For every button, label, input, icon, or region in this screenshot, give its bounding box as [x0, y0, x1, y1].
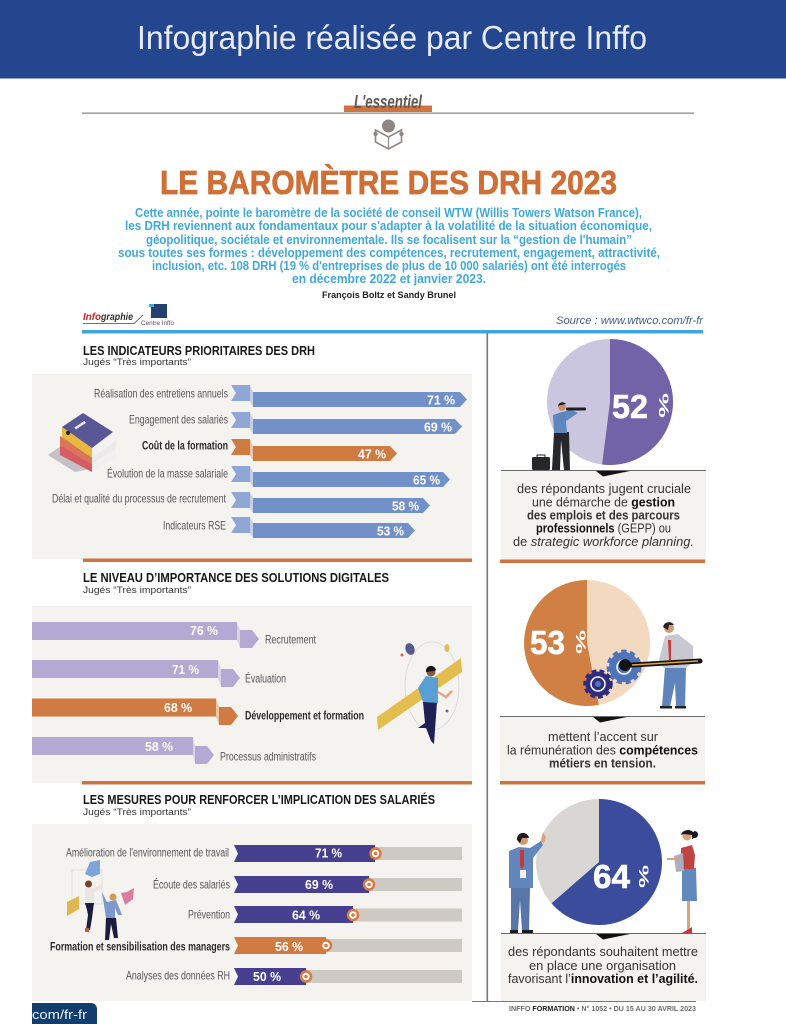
- intro paragraph: inclusion, etc. 108 DRH (19 % d'entreprises de plus de 10 000 salariés) ont été interrogés: [152, 259, 626, 273]
- icon: man carrying ruler: [377, 642, 462, 744]
- caption panel: professionnels (GEPP) ou: [536, 520, 671, 536]
- bar: prévention: 64 %: [292, 908, 320, 922]
- bar: amélioration de l'environnement de travail: [66, 845, 462, 862]
- infographie logo: [83, 304, 174, 327]
- bar: délai et qualité du processus de recrutement: 58 %: [392, 500, 419, 514]
- infographie logo: graphie: [100, 312, 133, 323]
- bar: développement et formation: Développement et formation: [245, 708, 364, 722]
- caption panel: des emplois et des parcours: [527, 508, 680, 522]
- bar: coût de la formation: [142, 438, 397, 462]
- icon: woman with folder: [667, 830, 698, 933]
- stat: 64 % innovation: [501, 799, 706, 1001]
- bar: développement et formation: [32, 698, 364, 725]
- infographie logo: Centre Inffo: [141, 320, 174, 327]
- bar: écoute des salariés: 69 %: [305, 878, 333, 892]
- bar: amélioration de l'environnement de travail: 71 %: [315, 846, 342, 860]
- footer: issue reference: INFFO FORMATION • N° 1052 • DU 15 AU 30 AVRIL 2023: [509, 1004, 696, 1013]
- bar: recrutement: 76 %: [190, 624, 218, 638]
- bar: prévention: Prévention: [188, 908, 230, 922]
- bar: formation et sensibilisation des managers: 56 %: [275, 940, 303, 954]
- bar: analyses des données RH: [126, 968, 462, 985]
- bar: engagement des salariés: 69 %: [424, 420, 452, 434]
- bar: analyses des données RH: Analyses des données RH: [126, 968, 230, 982]
- authors: François Boltz et Sandy Brunel: [322, 290, 456, 301]
- stat: 53 % rémunération: [500, 580, 705, 784]
- icon: reader with open book: [373, 120, 404, 149]
- bar: indicateurs RSE: [163, 517, 415, 538]
- header banner: Infographie réalisée par Centre Inffo: [137, 19, 647, 56]
- bar: formation et sensibilisation des managers: [50, 937, 462, 954]
- bar: évaluation: 71 %: [172, 663, 199, 677]
- bar: recrutement: Recrutement: [265, 632, 316, 646]
- heading: indicateurs: Jugés “Très importants”: [83, 357, 191, 368]
- heading: solutions digitales: [83, 571, 389, 596]
- caption panel: mettent l’accent sur: [548, 729, 659, 744]
- intro paragraph: [118, 206, 660, 286]
- bar: indicateurs RSE: Indicateurs RSE: [163, 518, 226, 532]
- bar: processus administratifs: Processus administratifs: [220, 750, 316, 764]
- heading: indicateurs: [83, 344, 315, 368]
- icon: colleagues and puzzle pieces: [67, 860, 134, 940]
- caption panel: [501, 933, 706, 1001]
- caption panel: des répondants jugent cruciale: [517, 481, 691, 496]
- column divider: [486, 333, 488, 1001]
- pie chart 52 %: %: [656, 393, 672, 419]
- icon: man with telescope: [532, 402, 586, 470]
- pie chart 53 %: [524, 580, 650, 706]
- pie chart 53 %: %: [573, 630, 589, 655]
- intro paragraph: les DRH reviennent aux fondamentaux pour s'adapter à la volatilité de la situation économique,: [125, 219, 652, 233]
- bar: recrutement: [32, 622, 316, 648]
- bar: processus administratifs: [32, 737, 316, 764]
- intro paragraph: en décembre 2022 et janvier 2023.: [292, 272, 486, 286]
- caption panel: de strategic workforce planning.: [513, 534, 694, 549]
- intro paragraph: sous toutes ses formes : développement des compétences, recrutement, engagement, attractivité,: [118, 246, 660, 260]
- header banner: [0, 0, 786, 78]
- caption panel: favorisant l’innovation et l’agilité.: [508, 971, 698, 986]
- pie chart 52 %: 52: [612, 388, 648, 425]
- bar: évolution de la masse salariale: Évolution de la masse salariale: [107, 466, 228, 480]
- bar: prévention: [188, 906, 462, 923]
- section tag: L'essentiel: [82, 92, 694, 114]
- panel: solutions digitales: [32, 571, 472, 783]
- bar: délai et qualité du processus de recrutement: [52, 492, 430, 514]
- url chip: com/fr-fr: [32, 1008, 87, 1022]
- stat: 52 % GEPP: [500, 339, 706, 563]
- caption panel: [500, 716, 705, 781]
- pie chart 53 %: 53: [530, 624, 565, 661]
- bar: réalisation des entretiens annuels: Réalisation des entretiens annuels: [94, 386, 228, 400]
- url chip: [32, 1003, 97, 1024]
- heading: solutions digitales: LE NIVEAU D’IMPORTANCE DES SOLUTIONS DIGITALES: [83, 571, 389, 585]
- bar: évaluation: Évaluation: [245, 670, 286, 686]
- bar: indicateurs RSE: 53 %: [377, 524, 404, 538]
- caption panel: la rémunération des compétences: [507, 742, 698, 758]
- bar: délai et qualité du processus de recrutement: Délai et qualité du processus de recrutement: [52, 492, 226, 506]
- heading: mesures: Jugés “Très importants”: [83, 807, 191, 818]
- heading: mesures: LES MESURES POUR RENFORCER L’IMPLICATION DES SALARIÉS: [83, 792, 435, 807]
- bar: développement et formation: 68 %: [164, 701, 192, 715]
- caption panel: une démarche de gestion: [532, 494, 675, 510]
- pie chart 64 %: 64: [593, 858, 631, 895]
- heading: solutions digitales: Jugés “Très importants”: [83, 585, 191, 596]
- bar: processus administratifs: 58 %: [145, 740, 173, 754]
- pie chart 64 %: [536, 799, 662, 925]
- source: Source : www.wtwco.com/fr-fr: [556, 315, 704, 327]
- bar: engagement des salariés: [129, 412, 462, 434]
- bar: évaluation: [32, 660, 286, 687]
- section tag: L'essentiel: L'essentiel: [354, 92, 423, 112]
- bar: écoute des salariés: [153, 876, 462, 893]
- intro paragraph: géopolitique, sociétale et environnementale. Ils se focalisent sur la “gestion de l'humain”: [146, 233, 632, 247]
- heading: mesures: [83, 792, 435, 818]
- bar: amélioration de l'environnement de travail: Amélioration de l'environnement de travail: [66, 846, 229, 860]
- bar: coût de la formation: 47 %: [358, 448, 386, 462]
- icon: man presenting: [509, 832, 546, 933]
- pie chart 64 %: %: [636, 865, 652, 889]
- bar: réalisation des entretiens annuels: 71 %: [427, 394, 455, 408]
- icon: gears and engineer with wrench: [586, 622, 700, 708]
- bar: évolution de la masse salariale: 65 %: [413, 474, 440, 488]
- bar: engagement des salariés: Engagement des salariés: [129, 412, 228, 426]
- panel background: [32, 374, 472, 559]
- caption panel: en place une organisation: [529, 958, 676, 973]
- caption panel: des répondants souhaitent mettre: [508, 944, 698, 959]
- top blue rule: [82, 330, 703, 334]
- bar: évolution de la masse salariale: [107, 466, 450, 488]
- caption panel: [501, 470, 706, 560]
- panel: indicateurs prioritaires: [32, 344, 472, 559]
- bar: réalisation des entretiens annuels: [94, 385, 467, 408]
- bar: analyses des données RH: 50 %: [253, 970, 281, 984]
- bar: coût de la formation: Coût de la formation: [142, 438, 228, 452]
- pie chart 52 %: [547, 339, 673, 465]
- panel background: [32, 606, 472, 783]
- caption panel: métiers en tension.: [549, 756, 656, 770]
- icon: stack of binders: [48, 413, 117, 472]
- panel: mesures implication: [32, 792, 472, 1001]
- bar: formation et sensibilisation des managers: Formation et sensibilisation des managers: [50, 940, 230, 954]
- bar: écoute des salariés: Écoute des salariés: [153, 876, 230, 892]
- intro paragraph: Cette année, pointe le baromètre de la société de conseil WTW (Willis Towers Watson France),: [135, 206, 642, 220]
- title: LE BAROMÈTRE DES DRH 2023: [160, 164, 617, 202]
- infographie logo: Info: [83, 312, 101, 323]
- heading: indicateurs: LES INDICATEURS PRIORITAIRES DES DRH: [83, 344, 315, 358]
- panel background: [32, 824, 472, 1001]
